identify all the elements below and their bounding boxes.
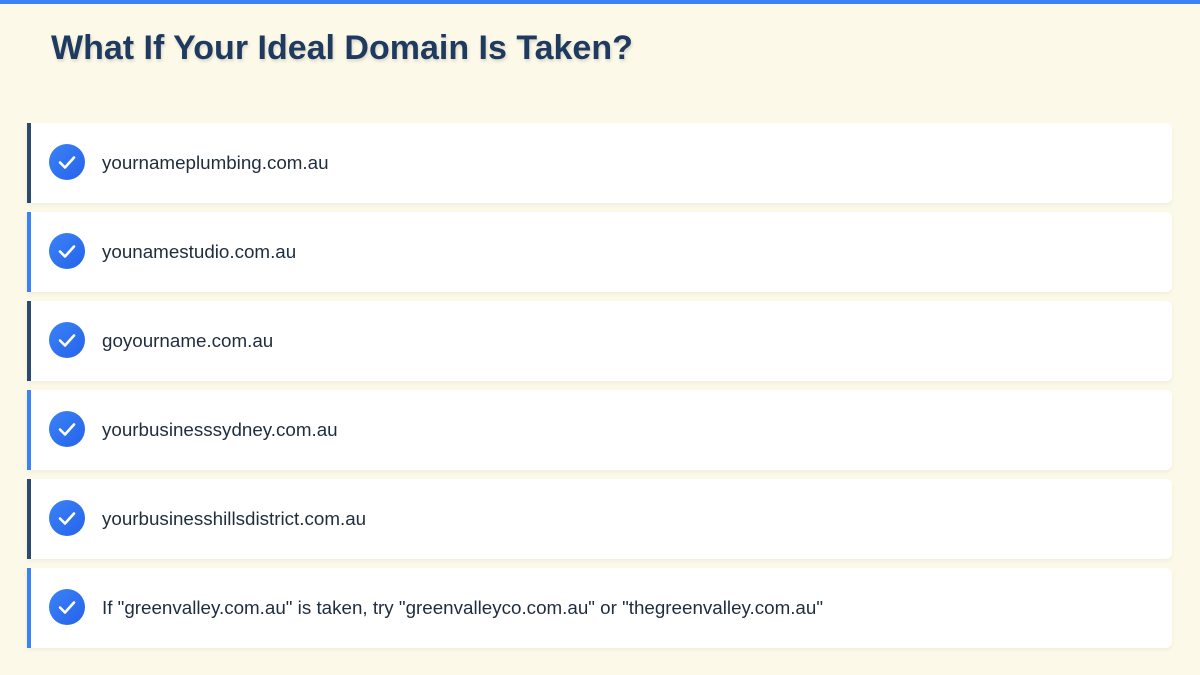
card 1: yournameplumbing.com.au [102, 152, 329, 173]
card 5: yourbusinesshillsdistrict.com.au [102, 508, 366, 529]
card 1 [27, 123, 1172, 203]
title: What If Your Ideal Domain Is Taken? [51, 29, 633, 67]
card 4 [27, 390, 1172, 470]
card 6: If "greenvalley.com.au" is taken, try "greenvalleyco.com.au" or "thegreenvalley.com.au" [102, 597, 823, 618]
card 6 [27, 568, 1172, 648]
card 3 [27, 301, 1172, 381]
card 3: goyourname.com.au [102, 330, 273, 351]
card 4: yourbusinesssydney.com.au [102, 419, 338, 440]
card 2 [27, 212, 1172, 292]
card 2: younamestudio.com.au [102, 241, 296, 262]
card 5 [27, 479, 1172, 559]
